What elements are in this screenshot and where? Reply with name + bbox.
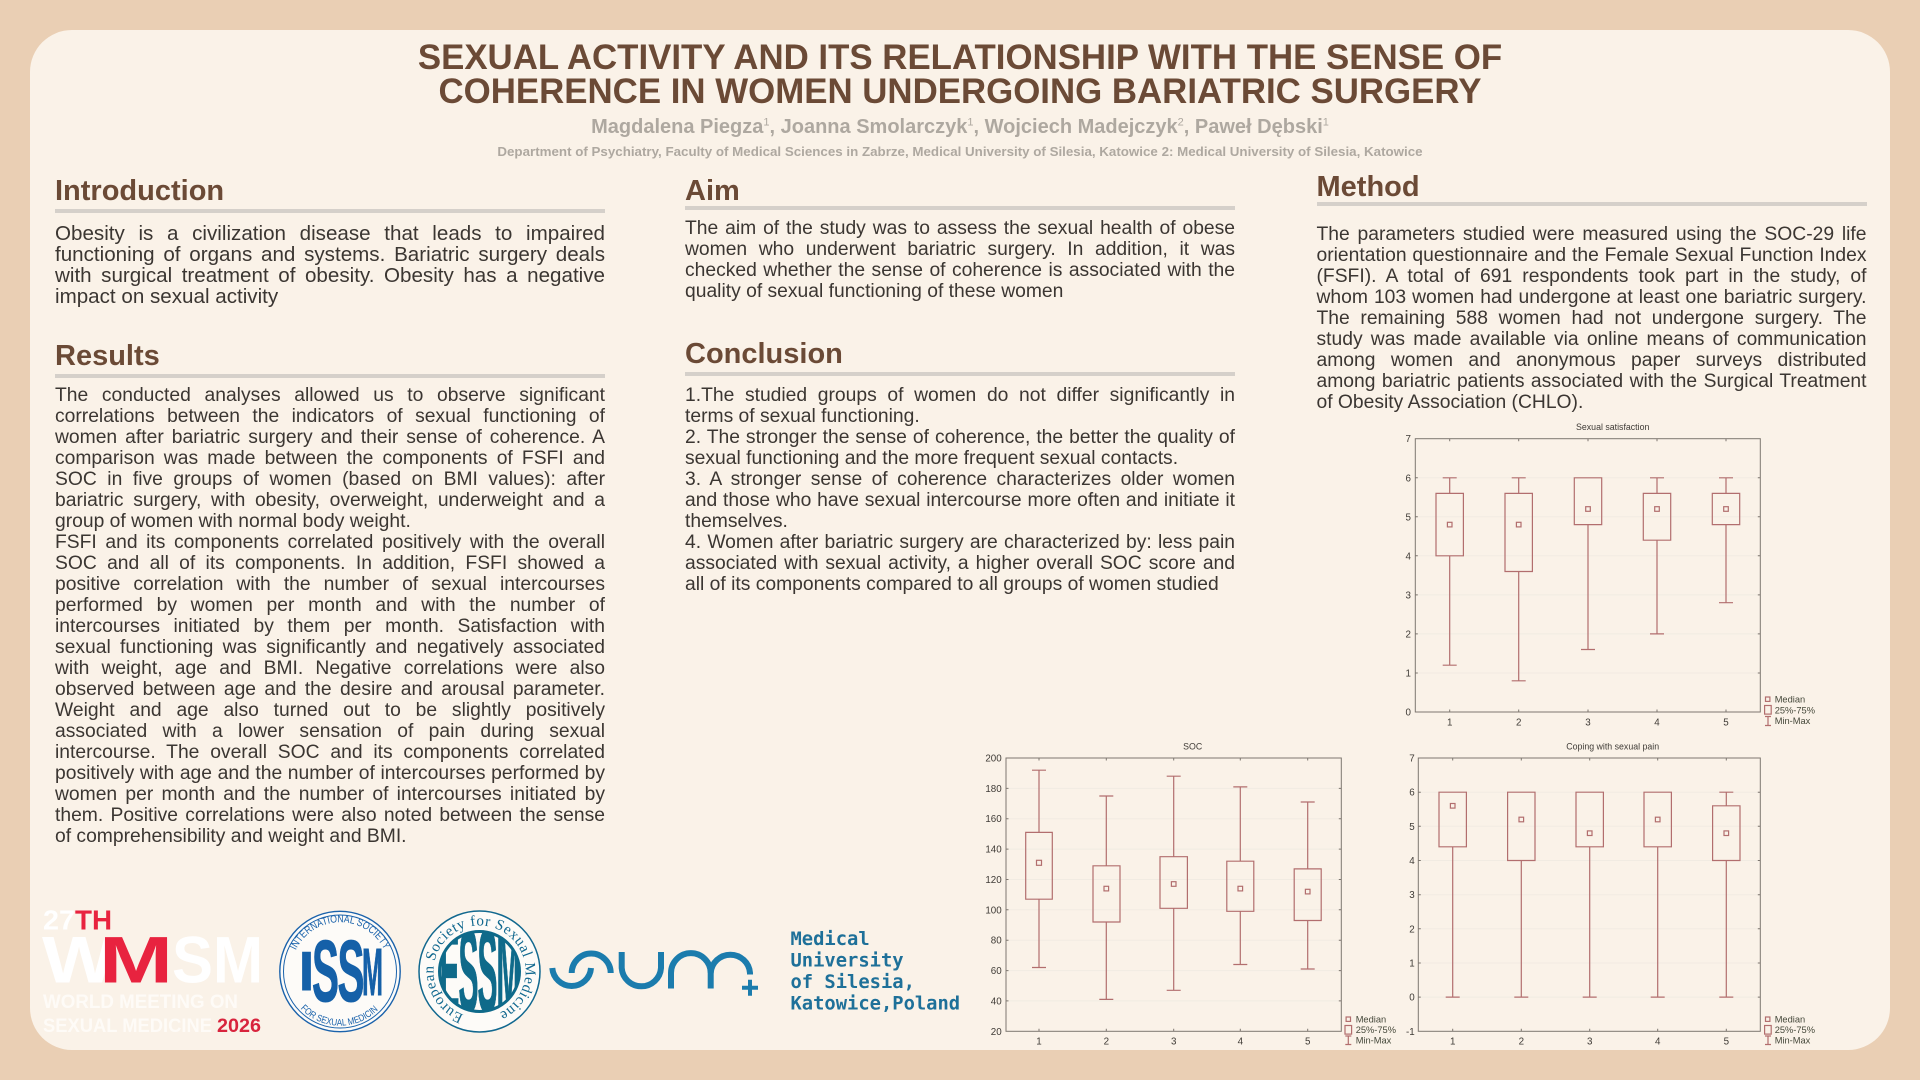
legend: 25%-75% — [1775, 1025, 1815, 1035]
y axis labels: 3 — [1406, 590, 1412, 601]
title: SEXUAL ACTIVITY AND ITS RELATIONSHIP WITH THE SENSE OF — [418, 38, 1502, 77]
chart title: Coping with sexual pain — [1566, 742, 1659, 752]
y axis labels: 0 — [1409, 993, 1415, 1004]
text: conclusion list: all of its components compared to all groups of women studied — [685, 574, 1219, 595]
logo: ISSM: I — [299, 940, 314, 1002]
logo: ESSM: S — [458, 906, 478, 1038]
text: results body: positive correlation with the number of sexual intercourses — [55, 574, 605, 595]
text: conclusion list: and those who have sexual intercourse more often and initiate it — [685, 490, 1235, 511]
heading: introduction: Introduction — [55, 175, 224, 207]
heading: conclusion: Conclusion — [685, 338, 843, 370]
legend — [1345, 1014, 1396, 1046]
text: results body: SOC in five groups of women (based on BMI values): after — [55, 469, 605, 490]
legend: 25%-75% — [1356, 1025, 1396, 1035]
chart: coping with sexual pain box plot — [1406, 742, 1815, 1048]
y axis labels: 1 — [1409, 958, 1415, 970]
text: method body: orientation questionnaire and the Female Sexual Function Index — [1316, 245, 1866, 266]
text: results body: women after bariatric surgery and their sense of coherence. A — [55, 427, 605, 448]
logo: Medical University of Silesia text: Katowice,Poland — [790, 994, 960, 1014]
legend: Median — [1775, 1014, 1805, 1024]
y axis labels: 80 — [991, 936, 1002, 947]
title: COHERENCE IN WOMEN UNDERGOING BARIATRIC SURGERY — [439, 72, 1481, 111]
heading: method: Method — [1316, 171, 1420, 203]
legend: 25%-75% — [1775, 706, 1815, 716]
chart: SOC box plot — [985, 742, 1396, 1048]
x axis labels: 5 — [1723, 717, 1729, 728]
y axis labels: 160 — [985, 814, 1002, 825]
y axis labels: 2 — [1409, 924, 1415, 935]
text: conclusion list: terms of sexual functioning. — [685, 406, 920, 427]
panel: aim — [685, 175, 1235, 302]
x axis labels: 3 — [1587, 1036, 1593, 1048]
text: method body: among bariatric patients associated with the Surgical Treatment — [1316, 371, 1866, 392]
text: results body — [55, 385, 605, 847]
y axis labels: 4 — [1406, 551, 1412, 562]
logo: ISSM — [279, 910, 401, 1032]
legend: Median — [1356, 1014, 1386, 1024]
logo: ISSM: INTERNATIONAL SOCIETY — [290, 916, 390, 950]
logo: ESSM: E — [440, 906, 460, 1038]
text: results body: associated with a lower sensation of pain during sexual — [55, 721, 605, 742]
text: results body: women per month and the number of intercourses initiated by — [55, 784, 605, 805]
text: introduction body: with surgical treatment of obesity. Obesity has a negative — [55, 264, 605, 287]
y axis labels: 100 — [985, 905, 1002, 916]
text: aim body: The aim of the study was to assess the sexual health of obese — [685, 218, 1235, 239]
boxes and whiskers — [1436, 478, 1740, 681]
y axis labels: 120 — [985, 875, 1002, 886]
text: results body: Weight and age also turned out to be slightly positively — [55, 700, 605, 721]
text: results body: comparison was made between the components of FSFI and — [55, 448, 605, 469]
logo: 27th WMSM World Meeting on Sexual Medicine 2026: 2026 — [217, 1016, 261, 1037]
text: conclusion list — [685, 385, 1235, 595]
text: results body: bariatric surgery, with obesity, overweight, underweight and a — [55, 490, 605, 511]
text: results body: correlations between the indicators of sexual functioning of — [55, 406, 605, 427]
heading rule — [685, 372, 1235, 376]
y axis labels: 0 — [1406, 708, 1412, 718]
text: aim body — [685, 218, 1235, 302]
gridlines and frame — [1006, 758, 1341, 1031]
boxes and whiskers — [1026, 770, 1321, 999]
chart title: SOC — [1183, 742, 1203, 752]
text: introduction body: impact on sexual activity — [55, 285, 278, 308]
legend — [1765, 1014, 1815, 1046]
y axis labels: 180 — [985, 784, 1002, 795]
y axis labels: 200 — [985, 754, 1002, 764]
text: method body: (FSFI). A total of 691 respondents took part in the study, of — [1316, 266, 1866, 287]
legend: Min-Max — [1775, 1036, 1811, 1046]
y axis labels: 5 — [1409, 822, 1415, 833]
text: method body — [1316, 224, 1866, 413]
logo: ISSM: S — [312, 923, 339, 1020]
y axis labels: -1 — [1406, 1027, 1415, 1038]
logo: 27th WMSM World Meeting on Sexual Medicine 2026: S — [172, 922, 213, 996]
x axis labels: 3 — [1585, 717, 1591, 728]
text: results body: performed by women per month and with the number of — [55, 595, 605, 616]
legend: Min-Max — [1356, 1036, 1392, 1046]
gridlines and frame — [1418, 758, 1760, 1031]
panel: conclusion — [685, 338, 1235, 595]
text: conclusion list: 3. A stronger sense of coherence characterizes older women — [685, 469, 1235, 490]
text: method body: of Obesity Association (CHLO). — [1316, 392, 1583, 413]
logo: ESSM: S — [478, 906, 498, 1038]
text: conclusion list: 4. Women after bariatric surgery are characterized by: less pain — [685, 532, 1235, 553]
y axis labels — [1406, 434, 1412, 718]
text: method body: whom 103 women had undergone at least one bariatric surgery. — [1316, 287, 1866, 308]
x axis labels — [1447, 717, 1729, 728]
y axis labels: 6 — [1406, 473, 1412, 484]
text: aim body: women who underwent bariatric surgery. In addition, it was — [685, 239, 1235, 260]
x axis labels — [1450, 1036, 1730, 1048]
text: introduction body: functioning of organs and systems. Bariatric surgery deals — [55, 243, 605, 266]
text: introduction body: Obesity is a civilization disease that leads to impaired — [55, 222, 605, 245]
logo: 27th WMSM World Meeting on Sexual Medicine 2026: M — [99, 922, 173, 996]
text: conclusion list: associated with sexual activity, a higher overall SOC score and — [685, 553, 1235, 574]
x axis labels: 1 — [1036, 1036, 1042, 1048]
logo: ESSM: European Society for Sexual Medicine — [426, 915, 536, 1024]
logo: 27th WMSM World Meeting on Sexual Medicine 2026: M — [213, 922, 263, 996]
x axis labels: 4 — [1654, 717, 1660, 728]
text: results body: group of women with normal body weight. — [55, 511, 411, 532]
text: conclusion list: 2. The stronger the sense of coherence, the better the quality of — [685, 427, 1235, 448]
logo: 27th WMSM World Meeting on Sexual Medicine 2026: W — [42, 922, 117, 996]
y axis labels: 6 — [1409, 788, 1415, 799]
chart title: Sexual satisfaction — [1576, 422, 1649, 432]
y axis labels: 60 — [991, 966, 1002, 977]
x axis labels: 3 — [1171, 1036, 1177, 1048]
y axis labels: 7 — [1409, 754, 1415, 764]
x axis labels: 2 — [1104, 1036, 1109, 1048]
boxes and whiskers — [1439, 792, 1740, 997]
x axis labels — [1036, 1036, 1311, 1048]
text: conclusion list: 1.The studied groups of women do not differ significantly in — [685, 385, 1235, 406]
text: results body: of comprehensibility and weight and BMI. — [55, 826, 407, 847]
y axis labels: 5 — [1406, 512, 1412, 523]
heading: results: Results — [55, 340, 160, 372]
legend — [1765, 694, 1815, 726]
text: aim body: quality of sexual functioning of these women — [685, 281, 1063, 302]
logo: Medical University of Silesia text — [790, 929, 960, 1014]
y axis labels: 1 — [1406, 668, 1411, 680]
text: results body: observed between age and the desire and arousal parameter. — [55, 679, 605, 700]
text: results body: positively with age and the number of intercourses performed by — [55, 763, 605, 784]
logo: Medical University of Silesia text: University — [790, 950, 904, 972]
panel: results — [55, 340, 605, 847]
logo: ISSM: FOR SEXUAL MEDICINE — [300, 1004, 378, 1026]
heading rule — [1316, 202, 1866, 206]
heading rule — [685, 206, 1235, 210]
text: results body: The conducted analyses allowed us to observe significant — [55, 385, 605, 406]
text: method body: The parameters studied were measured using the SOC-29 life — [1316, 224, 1866, 245]
text: results body: intercourses initiated by them per month. Satisfaction with — [55, 616, 605, 637]
legend: Min-Max — [1775, 716, 1811, 726]
logo: 27th WMSM World Meeting on Sexual Medicine 2026: SEXUAL MEDICINE — [43, 1016, 212, 1037]
heading rule — [55, 209, 605, 213]
authors: Magdalena Piegza1, Joanna Smolarczyk1, Wojciech Madejczyk2, Paweł Dębski1 — [591, 116, 1329, 138]
text: method body: among women and anonymous paper surveys distributed — [1316, 350, 1866, 371]
y axis labels — [1406, 754, 1415, 1038]
y axis labels — [985, 754, 1002, 1038]
logo: 27th WMSM World Meeting on Sexual Medicine 2026: 27 — [43, 904, 75, 936]
text: conclusion list: themselves. — [685, 511, 788, 532]
x axis labels: 5 — [1305, 1036, 1311, 1048]
y axis labels: 2 — [1406, 629, 1411, 640]
title — [418, 38, 1502, 111]
heading: aim: Aim — [685, 175, 740, 207]
panel: introduction — [55, 175, 605, 308]
x axis labels: 1 — [1450, 1036, 1455, 1048]
logo: SUM+ mark — [552, 952, 758, 996]
text: introduction body — [55, 222, 605, 308]
text: results body: sexual functioning was significantly and negatively associated — [55, 637, 605, 658]
logo: 27th WMSM World Meeting on Sexual Medicine 2026: TH — [75, 904, 112, 936]
text: results body: SOC and all of its components. In addition, FSFI showed a — [55, 553, 605, 574]
logo: Medical University of Silesia text: of Silesia, — [790, 972, 915, 993]
logo: 27th WMSM World Meeting on Sexual Medicine 2026: WORLD MEETING ON — [43, 992, 238, 1013]
text: method body: The remaining 588 women had not undergone surgery. The — [1316, 308, 1866, 329]
x axis labels: 4 — [1655, 1036, 1661, 1048]
text: results body: them. Positive correlations were also noted between the sense — [55, 805, 605, 826]
text: results body: with weight, age and BMI. Negative correlations were also — [55, 658, 605, 679]
y axis labels: 7 — [1406, 434, 1411, 445]
text: M — [496, 906, 520, 1038]
chart: sexual satisfaction box plot — [1406, 422, 1815, 728]
heading rule — [55, 374, 605, 378]
logo: Medical University of Silesia text: Medical — [790, 929, 870, 950]
legend: Median — [1775, 694, 1805, 704]
y axis labels: 20 — [991, 1027, 1002, 1038]
logo: ISSM: M — [362, 935, 383, 1010]
gridlines and frame — [1415, 439, 1760, 712]
x axis labels: 2 — [1516, 717, 1521, 728]
logo: ISSM: S — [338, 923, 364, 1020]
x axis labels: 4 — [1238, 1036, 1244, 1048]
text: results body: intercourse. The overall SOC and its components correlated — [55, 742, 605, 763]
y axis labels: 4 — [1409, 856, 1415, 867]
logo: 27th WMSM World Meeting on Sexual Medicine 2026 — [42, 904, 263, 1037]
text: conclusion list: sexual functioning and the more frequent sexual contacts. — [685, 448, 1178, 469]
affiliations: Department of Psychiatry, Faculty of Medical Sciences in Zabrze, Medical University of Silesia, Katowice 2: Medical University of Silesia, Katowice — [497, 144, 1423, 159]
y axis labels: 3 — [1409, 890, 1415, 901]
x axis labels: 2 — [1519, 1036, 1524, 1048]
y axis labels: 140 — [985, 845, 1002, 856]
x axis labels: 5 — [1724, 1036, 1730, 1048]
text: method body: study was made available via online means of communication — [1316, 329, 1866, 350]
text: results body: FSFI and its components correlated positively with the overall — [55, 532, 605, 553]
panel: method — [1316, 171, 1867, 413]
x axis labels: 1 — [1447, 717, 1452, 728]
y axis labels: 40 — [991, 996, 1002, 1007]
text: aim body: checked whether the sense of coherence is associated with the — [685, 260, 1235, 281]
